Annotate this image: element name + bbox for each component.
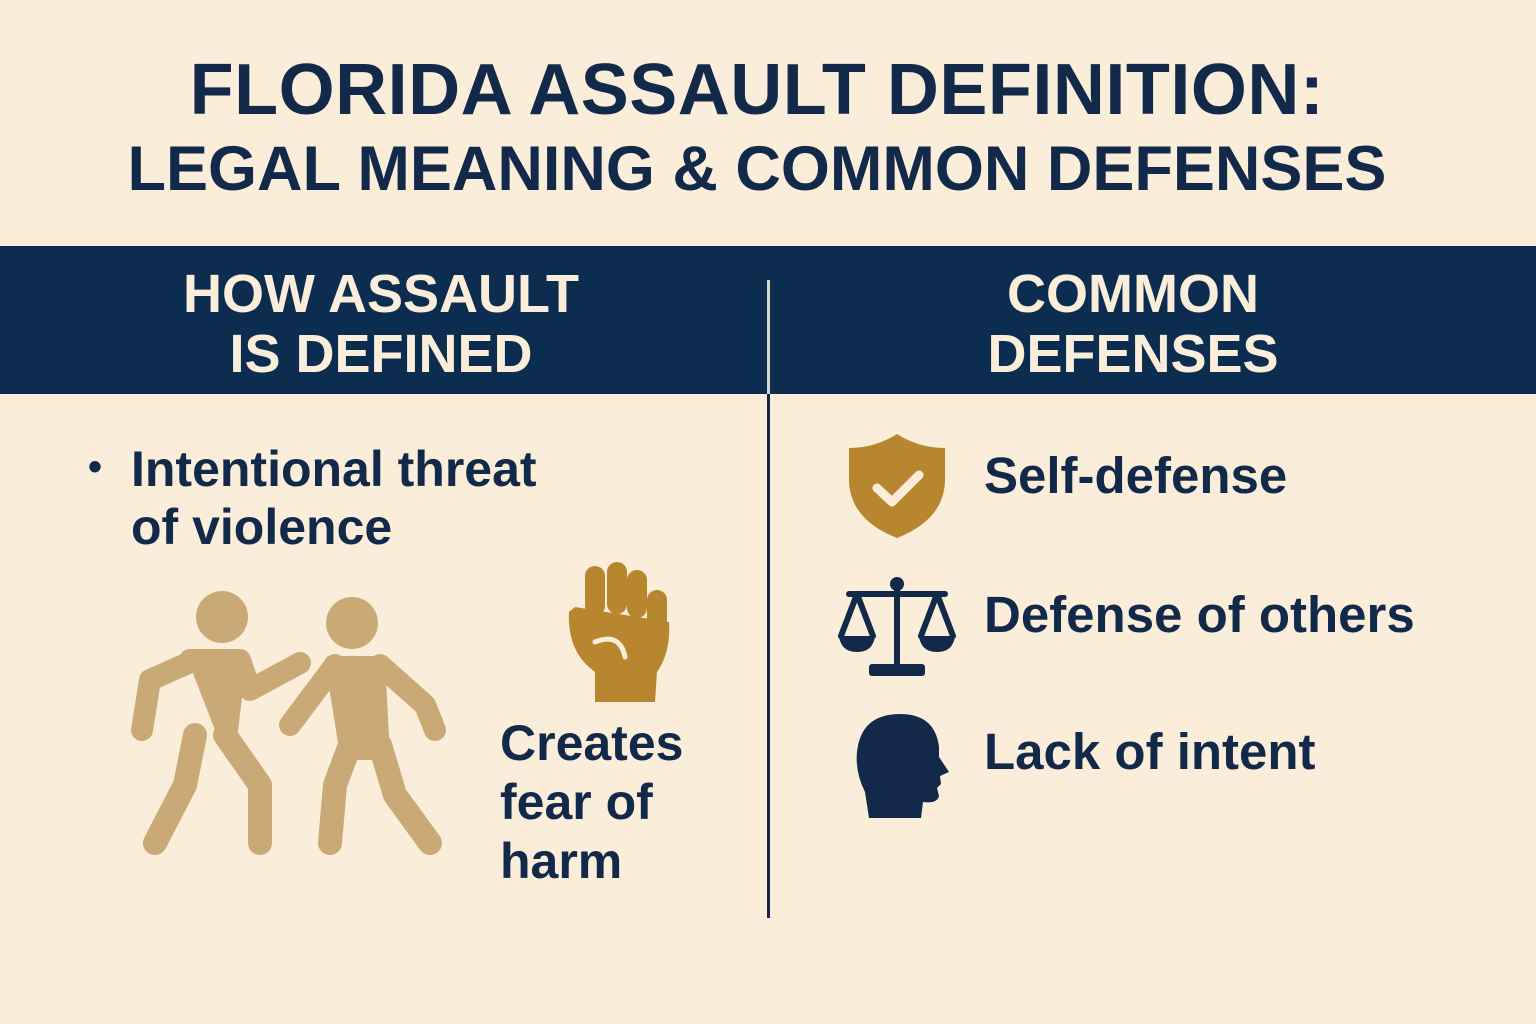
text: self-defense: Self-defense <box>984 447 1287 504</box>
header: common defenses: DEFENSES <box>987 324 1279 384</box>
text: creates fear of harm <box>500 715 683 889</box>
header: how assault is defined <box>183 264 579 384</box>
header: how assault is defined: HOW ASSAULT <box>183 264 579 324</box>
header: how assault is defined: IS DEFINED <box>229 324 533 384</box>
icon: two figures <box>131 591 446 855</box>
text: lack of intent: Lack of intent <box>984 723 1316 780</box>
text: creates fear of harm: fear of <box>500 774 653 830</box>
icon: shield <box>849 434 945 538</box>
title: LEGAL MEANING & COMMON DEFENSES <box>128 134 1386 204</box>
divider <box>767 280 770 394</box>
bullet text: intentional threat: Intentional threat <box>131 441 537 497</box>
title <box>128 50 1386 204</box>
bullet text: intentional threat <box>88 441 537 555</box>
icon: scales <box>838 577 956 676</box>
title: FLORIDA ASSAULT DEFINITION: <box>190 50 1324 130</box>
text: defense of others: Defense of others <box>984 586 1415 643</box>
icon: fist <box>568 562 670 702</box>
text: creates fear of harm: Creates <box>500 715 683 771</box>
header: common defenses: COMMON <box>1007 264 1259 324</box>
text: creates fear of harm: harm <box>500 833 622 889</box>
header: common defenses <box>987 264 1279 384</box>
icon: head <box>856 714 949 818</box>
bullet text: intentional threat: of violence <box>131 499 392 555</box>
header banner <box>0 246 1536 394</box>
bullet text: intentional threat: • <box>88 445 102 489</box>
